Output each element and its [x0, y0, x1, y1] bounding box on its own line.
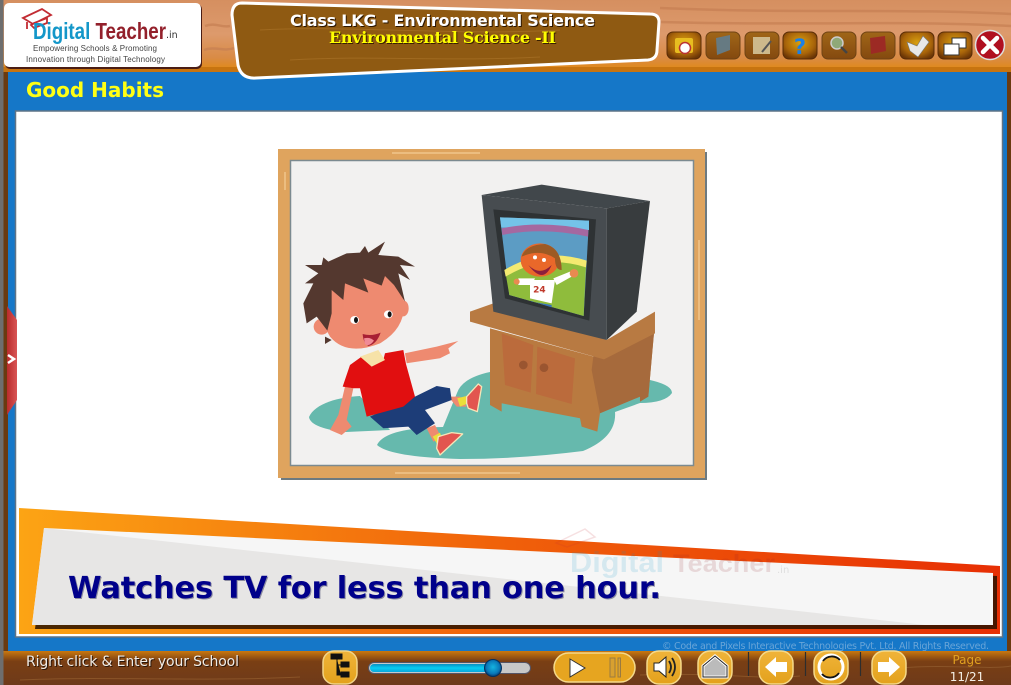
top wood header bar — [4, 0, 1011, 72]
banner background — [19, 508, 1000, 634]
white content panel — [16, 111, 1002, 637]
logo tagline: Innovation through Digital Technology — [26, 55, 165, 64]
logo tagline: Empowering Schools & Promoting — [33, 44, 157, 53]
boy eyes — [350, 310, 393, 324]
button: search — [822, 32, 856, 59]
slider knob — [484, 660, 502, 676]
boy shoes and socks — [427, 384, 482, 455]
boy mouth — [363, 333, 381, 346]
button: refresh — [814, 651, 848, 684]
boy shirt — [343, 350, 415, 417]
bottom control bar — [4, 651, 1011, 685]
title line 2: Environmental Science -II — [329, 28, 556, 47]
button: home — [698, 651, 732, 684]
logo suffix: .in — [166, 30, 178, 41]
logo panel — [4, 3, 202, 69]
button: contents tree — [323, 651, 357, 684]
school prompt: Right click & Enter your School — [26, 654, 239, 670]
tv screen picture — [500, 217, 589, 316]
illustration: rug — [309, 372, 672, 459]
tab arrow — [8, 355, 14, 363]
picture frame — [278, 149, 707, 480]
button: dictionary — [861, 32, 895, 59]
caption: Watches TV for less than one hour. — [68, 571, 661, 606]
left side tab — [7, 306, 17, 415]
boy hair — [303, 242, 415, 344]
banner shadow — [35, 531, 997, 629]
title line 1: Class LKG - Environmental Science — [290, 11, 595, 30]
boy back arm — [330, 387, 353, 435]
button: history — [667, 32, 701, 59]
title line 1: Class LKG - Environmental Science — [291, 12, 596, 31]
button: notes — [745, 32, 779, 59]
watermark logo: Digital — [570, 547, 664, 579]
title plaque — [232, 3, 659, 78]
button: help — [783, 32, 817, 59]
illustration: television: 24 — [533, 286, 546, 296]
button: window resize — [938, 32, 972, 59]
logo wordmark: Digital Teacher — [33, 18, 166, 44]
watermark logo: Teacher — [673, 550, 775, 578]
banner panel — [32, 528, 993, 625]
button: close — [976, 30, 1004, 60]
illustration: boy — [303, 242, 482, 455]
page number: 11/21 — [950, 670, 984, 684]
button: back — [759, 651, 793, 684]
boy arm pointing — [405, 341, 458, 363]
progress slider — [368, 660, 530, 676]
caption: Watches TV for less than one hour. — [69, 572, 662, 607]
toolbar: top buttons — [667, 30, 1004, 60]
button: open book — [900, 32, 934, 59]
school prompt: Right click & Enter your School — [27, 655, 240, 671]
button: help: ? — [794, 35, 806, 59]
separators — [748, 652, 860, 676]
watermark logo: .in — [777, 565, 789, 576]
illustration: television — [482, 185, 650, 340]
watermark logo — [556, 529, 789, 579]
page label: Page — [952, 653, 982, 667]
title line 2: Environmental Science -II — [330, 29, 557, 48]
boy shorts — [370, 386, 452, 435]
button: sound — [647, 651, 681, 684]
heading: Good Habits: Good Habits — [26, 78, 164, 102]
icon: graduation cap — [23, 9, 51, 29]
play and pause control — [554, 653, 635, 682]
copyright: © Code and Pixels Interactive Technologies Pvt. Ltd. All Rights Reserved. — [662, 641, 989, 652]
button: reference — [706, 32, 740, 59]
button: next — [872, 651, 906, 684]
illustration: tv cabinet — [470, 303, 655, 432]
boy face — [314, 272, 409, 349]
